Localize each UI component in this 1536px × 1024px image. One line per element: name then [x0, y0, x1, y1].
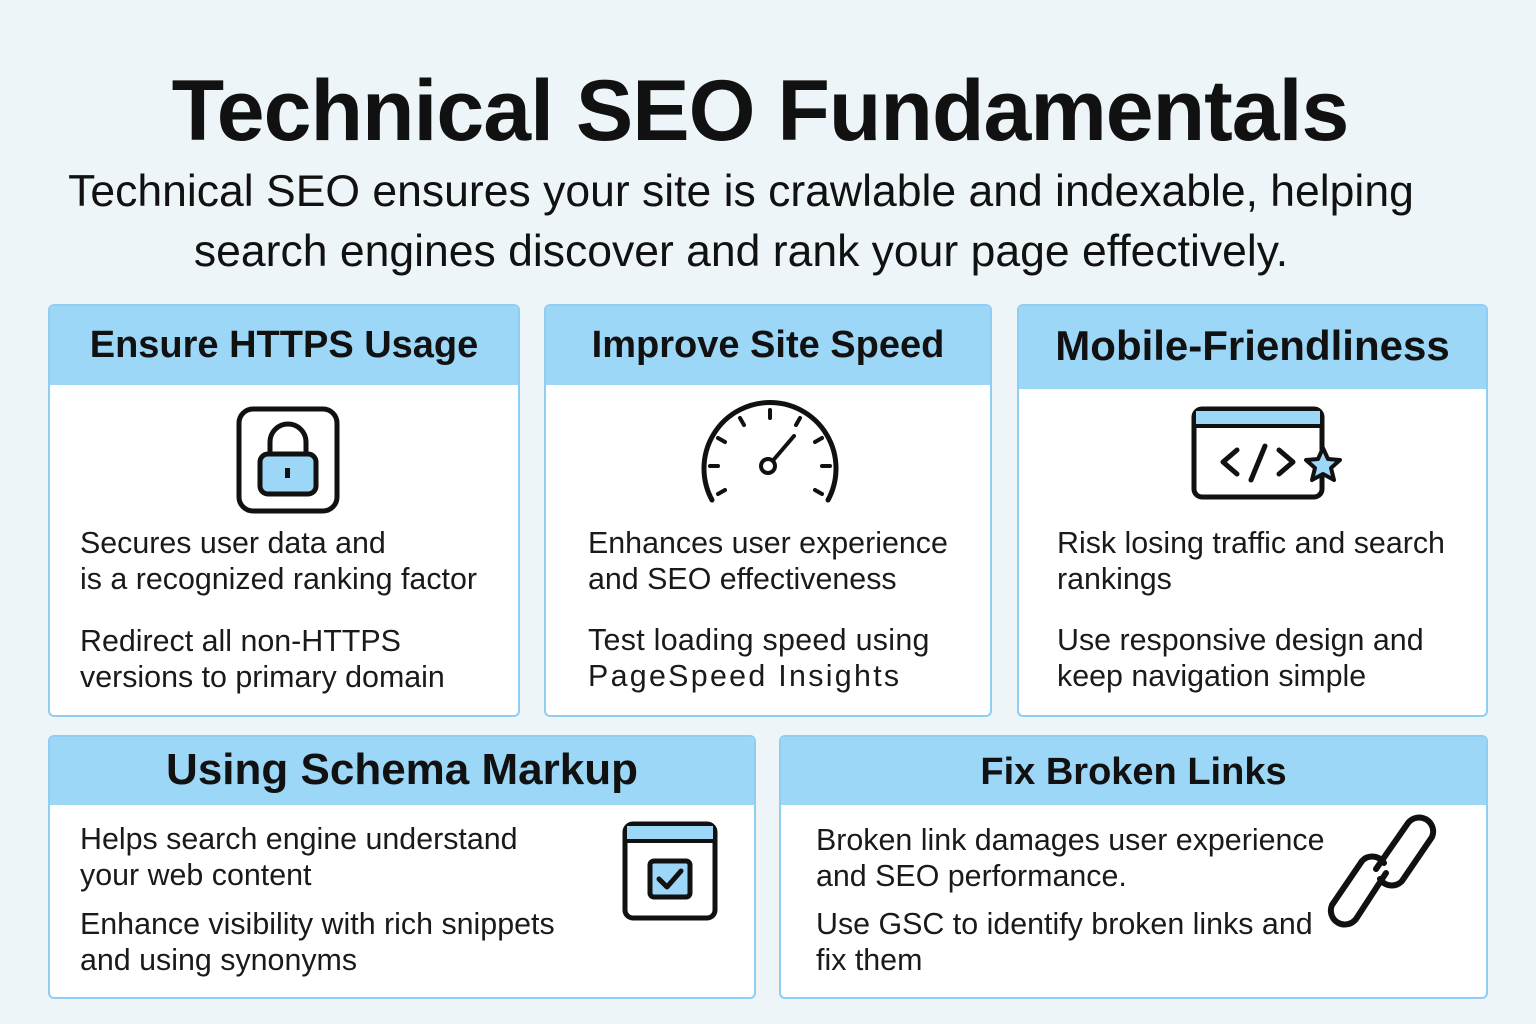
text: mobile tip	[1057, 623, 1424, 693]
text: broken links tip: Use GSC to identify broken links and	[816, 907, 1313, 941]
icon: code window	[1192, 406, 1342, 500]
text: schema tip: and using synonyms	[80, 943, 357, 977]
text: HTTPS	[80, 526, 477, 596]
heading: speed	[546, 306, 990, 385]
text: HTTPS tip: Redirect all non-HTTPS	[80, 624, 401, 658]
panel: HTTPS	[48, 304, 520, 717]
icon: chain link	[1328, 814, 1436, 928]
text: broken links: Broken link damages user experience	[816, 823, 1324, 857]
text: speed tip: PageSpeed Insights	[588, 659, 901, 693]
icon: lock	[236, 406, 340, 514]
text: broken links tip	[816, 907, 1313, 977]
heading: HTTPS	[50, 306, 518, 385]
heading: schema	[50, 737, 754, 805]
text: HTTPS tip: versions to primary domain	[80, 660, 445, 694]
text: broken links tip: fix them	[816, 943, 922, 977]
heading: speed: Improve Site Speed	[592, 324, 944, 366]
text: broken links	[816, 823, 1324, 893]
text: schema tip	[80, 907, 555, 977]
text: speed	[588, 526, 948, 596]
icon: gauge	[702, 400, 838, 502]
text: schema	[80, 822, 518, 892]
text: schema tip: Enhance visibility with rich snippets	[80, 907, 555, 941]
panel: broken links	[779, 735, 1488, 999]
text: mobile tip: keep navigation simple	[1057, 659, 1366, 693]
title: Technical SEO Fundamentals	[172, 63, 1348, 159]
heading: schema: Using Schema Markup	[166, 745, 638, 794]
text: mobile	[1057, 526, 1445, 596]
text: broken links: and SEO performance.	[816, 859, 1127, 893]
text: HTTPS: Secures user data and	[80, 526, 386, 560]
text: schema: Helps search engine understand	[80, 822, 518, 856]
panel: speed	[544, 304, 992, 717]
icon: checkbox window	[622, 822, 718, 920]
subtitle: Technical SEO ensures your site is crawlable and indexable, helping	[68, 167, 1414, 216]
heading: mobile: Mobile-Friendliness	[1055, 322, 1450, 369]
subtitle	[68, 167, 1414, 276]
text: mobile tip: Use responsive design and	[1057, 623, 1424, 657]
text: speed tip	[588, 623, 930, 693]
heading: broken links: Fix Broken Links	[980, 751, 1287, 793]
text: HTTPS tip	[80, 624, 445, 694]
text: speed: Enhances user experience	[588, 526, 948, 560]
heading: HTTPS: Ensure HTTPS Usage	[90, 324, 478, 366]
text: mobile: Risk losing traffic and search	[1057, 526, 1445, 560]
heading: broken links	[781, 737, 1486, 805]
heading: mobile	[1019, 306, 1486, 389]
text: schema: your web content	[80, 858, 311, 892]
text: HTTPS: is a recognized ranking factor	[80, 562, 477, 596]
text: speed: and SEO effectiveness	[588, 562, 897, 596]
panel: schema	[48, 735, 756, 999]
panel: mobile	[1017, 304, 1488, 717]
text: speed tip: Test loading speed using	[588, 623, 930, 657]
subtitle: search engines discover and rank your page effectively.	[194, 227, 1288, 276]
text: mobile: rankings	[1057, 562, 1172, 596]
